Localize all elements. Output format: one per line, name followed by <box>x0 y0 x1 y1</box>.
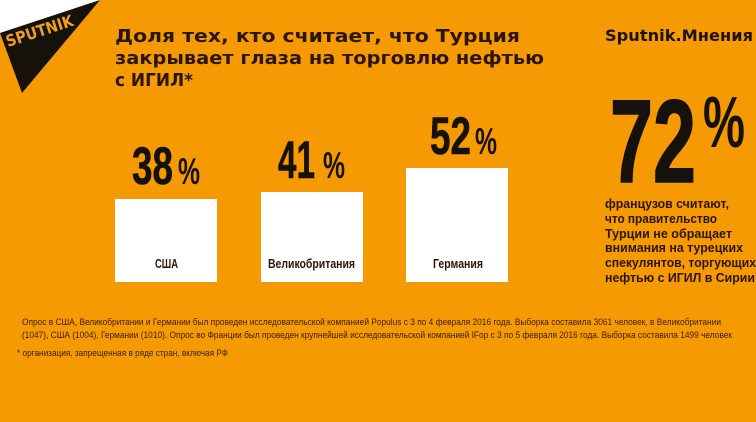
France text block: Турции не обращает <box>605 226 732 241</box>
title <box>115 26 544 91</box>
title: Доля тех, кто считает, что Турция <box>115 26 520 47</box>
survey note: Опрос в США, Великобритании и Германии был проведен исследовательской компанией Populus с 3 по 4 февраля 2016 года. Выборка составила 3061 человек, в Великобритании <box>22 317 721 327</box>
value: 38%: 38 <box>132 137 173 196</box>
big stat: 72%: 72 <box>610 76 696 208</box>
title: с ИГИЛ* <box>115 70 194 91</box>
France text block: внимания на турецких <box>605 240 744 255</box>
bar: США <box>115 137 217 282</box>
survey note <box>22 317 732 340</box>
logo: Sputnik: SPUTNIK <box>3 11 76 51</box>
France text block: что правительство <box>605 211 717 226</box>
title: закрывает глаза на торговлю нефтью <box>115 48 544 69</box>
bar: Великобритания: Великобритания <box>268 256 355 271</box>
value: 41%: 41 <box>278 131 315 190</box>
France text block: французов считают, <box>605 196 729 211</box>
heading: Sputnik.Мнения: Sputnik.Мнения <box>605 26 753 45</box>
footnote: * организация, запрещенная в ряде стран, включая РФ <box>17 348 228 358</box>
bar: Германия: Германия <box>433 256 483 271</box>
bar: Германия <box>406 107 508 282</box>
logo: Sputnik <box>0 0 100 93</box>
value: 38%: % <box>178 151 200 192</box>
value: 41%: % <box>323 145 345 186</box>
bar: Великобритания <box>261 131 363 282</box>
value: 52%: % <box>475 121 497 162</box>
value: 52%: 52 <box>430 107 471 166</box>
bar: США: США <box>155 256 178 271</box>
France text block <box>605 196 756 285</box>
